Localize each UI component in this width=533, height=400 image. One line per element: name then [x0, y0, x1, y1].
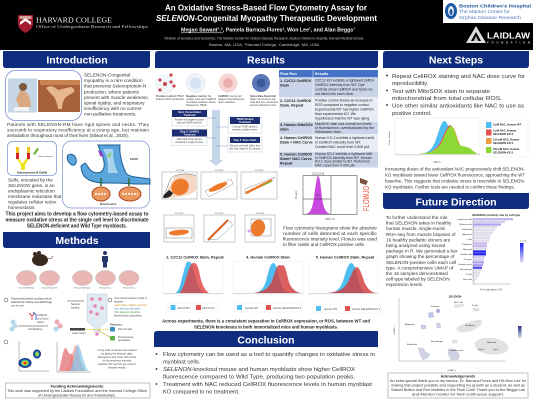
acknowledgements: Acknowledgements [441, 374, 475, 378]
intro text: spinal rigidity, and respiratory [84, 100, 145, 106]
patient description text: succumb to respiratory insufficiency at a young age, but maintain [7, 128, 149, 132]
legends: histograms: Human WT [324, 307, 338, 311]
panel: Results [155, 51, 381, 330]
chart: SELENON positivity by cell type: Pericytes [464, 258, 472, 261]
flow cytometry gating plots: C2C12-B [215, 170, 224, 172]
future direction text: 16 healthy pediatric donors are [386, 237, 451, 242]
legend: NAC dose curve [483, 120, 528, 157]
chart: C2C12-B CellROX histogram [294, 172, 357, 221]
control cell icons: CellROX: Living cell [218, 94, 242, 98]
step 1: cell loading: and Sytox [37, 316, 49, 320]
chart: SELENON positivity by cell type: Satellite cells [460, 253, 472, 256]
culture dishes: C2C12 Sepn1 KO [41, 288, 58, 290]
chart: SELENON positivity by cell type: Adipocytes [462, 233, 472, 236]
legend: NAC dose curve: 0 μM NAC, Human WT [493, 122, 522, 126]
chart: human CellROX stain repeat [309, 256, 378, 294]
chart: C2C12 CellROX stain repeat: 2. C2C12 CellROX Stain, Repeat [166, 256, 224, 260]
staining protocol timeline: Next, Uncontrolled [178, 111, 201, 114]
table: flow runs and results: Human KO-2 exhibits a rightward shift [315, 136, 374, 140]
chart: C2C12-B CellROX histogram: APC-A [325, 217, 335, 221]
results summary: Across experiments, there is a consistent separation in CellROX expression, or ROS, between WT and [162, 318, 370, 324]
conclusion bullets: Flow cytometry can be used as a tool to quantify changes in oxidative stress in [163, 352, 375, 358]
table: flow runs and results: Stain [280, 84, 290, 88]
NAC findings text: Increasing doses of the antioxidant NAC progressively shift SELENON- [385, 166, 525, 172]
next steps bullets: Use other similar antioxidants like NAC to use as [392, 104, 524, 110]
legend: NAC dose curve: SELENON-KO 2 [493, 141, 514, 145]
intro text [84, 72, 149, 117]
chart: C2C12-B CellROX histogram: Count [294, 191, 298, 199]
legend: NAC dose curve: 100 μM NAC, Human [493, 138, 520, 142]
flow cytometry explanation: fluorescence intensity level. FlowJo was used [283, 236, 377, 242]
intro text: myopathy is a rare condition [84, 78, 143, 83]
table: flow runs and results: Flow Run [280, 72, 297, 76]
future direction text: package in R. We generated a bar [386, 249, 458, 254]
chart: SELENON UMAP: Endothelial [407, 343, 417, 346]
culture dishes: Human Wild Type [75, 288, 91, 290]
panel: Future Direction [383, 193, 529, 398]
step 2 text: FSC detector identifies [114, 310, 141, 314]
poster title [156, 4, 377, 23]
table: flow runs and results: stain [280, 128, 289, 132]
chart: SELENON UMAP: UMAP_1 [448, 369, 457, 372]
table: flow runs and results: in CellROX intensity from WT. [315, 140, 361, 144]
staining protocol timeline: incubated in reagent before. [175, 141, 204, 144]
staining protocol timeline: Remove cells with buffer, then [230, 144, 261, 148]
flow cytometer: granularity [118, 338, 131, 342]
next steps bullets: mitochondrial from total cellular ROS. [392, 96, 502, 102]
legends: histograms: Human SELENON-KO 2 [273, 306, 302, 310]
next steps bullets [386, 74, 525, 117]
diagram: selenoprotein N structure: Selenoprotein N (SelN) [17, 170, 47, 174]
chart: SELENON positivity by cell type: Smooth muscle [458, 263, 473, 266]
heading: Results: Results [247, 54, 285, 66]
heading: Methods: Methods [55, 235, 99, 247]
control cell icons: upon oxidation. [218, 100, 236, 104]
diagram: selenoprotein N structure: Selenocysteine [38, 155, 54, 158]
panel: Methods [3, 232, 150, 398]
chart: SELENON positivity by cell type: Langerhans cells [457, 219, 472, 221]
legend: NAC dose curve: 0 μM NAC, Human [493, 128, 517, 132]
intro text: insufficiency with no current [84, 106, 142, 111]
conclusion bullets: SELENON-knockout mouse and human myoblasts show higher CellROX [163, 367, 355, 373]
flow cytometry explanation: to filter viable and CellROX positive cells. [283, 242, 365, 248]
chart: SELENON UMAP: Mast cells [454, 301, 463, 304]
flow cytometer: Fluorescence [118, 335, 134, 339]
heading: Results [155, 51, 378, 68]
chart: SELENON positivity by cell type: % cells [520, 240, 526, 242]
step 1: cell loading: CellROX [37, 313, 47, 317]
results summary [162, 318, 370, 330]
table: flow runs and results: Stain, Repeat [280, 104, 304, 108]
legends: histograms: Human SELENON-KO 2 [352, 307, 381, 311]
step 1: cell loading: one by one. [11, 304, 25, 308]
diagram: selenoprotein N structure [8, 142, 56, 176]
next steps bullets: Test with MitoSOX stain to separate [392, 89, 490, 95]
heading: Conclusion: Conclusion [237, 334, 295, 346]
table: flow runs and results: controls show CellROX and Sytox do [315, 88, 372, 92]
staining protocol timeline [172, 110, 262, 166]
flow cytometry explanation: Flow cytometry histograms show the absolute [283, 226, 377, 232]
flow cytometry gating plots [162, 170, 277, 242]
Laidlaw Foundation logo: FOUNDATION [487, 40, 530, 44]
flow cytometry explanation: number of cells detected at each specific [283, 231, 378, 237]
table: flow runs and results: Results [315, 72, 328, 76]
SelN description: regulates cellular redox [8, 200, 57, 204]
SelN description: SELENON gene, is an [8, 183, 55, 188]
table: flow runs and results: in CellROX intensity from WT. Human [315, 156, 372, 160]
flow cytometry gating plots: C2C12-B [256, 213, 265, 215]
panel: Conclusion [154, 331, 378, 396]
control cell icons: Stain: Fluorescent dye [250, 97, 276, 101]
chart: C2C12-B CellROX histogram: Bin [316, 193, 320, 197]
table: flow runs and results: of fluorescence, overshadowed by the [315, 126, 374, 130]
poster title: An Oxidative Stress-Based Flow Cytometry Assay for [165, 4, 367, 12]
future direction text: SELENON-positive cells each cell [386, 260, 456, 265]
staining protocol timeline: Treatment [184, 134, 196, 136]
chart: SELENON positivity by cell type: Schwann cells [459, 224, 472, 226]
header band [0, 0, 533, 50]
control cell icons: and are labeled in flow. [250, 103, 277, 107]
step 2 text: droplets. [114, 300, 124, 304]
future direction text: To further understand the role [386, 215, 448, 220]
patient description text [7, 122, 150, 138]
next steps bullets: reproducibility. [392, 81, 429, 87]
future direction text: the 16 samples demonstrated [386, 271, 448, 276]
chart: SELENON positivity by cell type: B cells [466, 274, 472, 276]
intro text: SELENON-Congenital [84, 72, 130, 78]
step 3: scatter and histogram results: between WT and KO are used to [98, 362, 136, 366]
step 2 text: fluorescence granularity [114, 314, 142, 318]
Harvard College logo [18, 15, 149, 33]
flow cytometer: Size of cells [118, 327, 133, 331]
future direction text: that SELENON takes in healthy [386, 221, 452, 226]
conclusion bullets [156, 352, 375, 396]
conclusion bullets: KO compared to no treatment. [163, 390, 240, 396]
affiliations: ¹Division of Genetics and Genomics, The Manton Center for Orphan Disease Research, Boston Children's Hospital, Harvard Medical School, [164, 36, 364, 40]
diagram: endoplasmic reticulum and mitochondria: ER/SR [130, 157, 138, 161]
future direction text: cell type labeled by SELENON [386, 277, 450, 282]
conclusion bullets: fluorescence compared to Wild Type, producing two population peaks. [163, 374, 355, 380]
chart: SELENON UMAP: Myonuclei [487, 342, 497, 344]
SelN description: homeostasis. [8, 205, 36, 210]
culture dishes [16, 270, 139, 290]
chart: SELENON positivity by cell type: SELENON positivity rate by cell type [472, 213, 521, 217]
chart: SELENON positivity by cell type: Myonuclei [463, 249, 473, 251]
step 2 text: Laser beam strikes each cell [114, 303, 147, 307]
flow cytometry gating plots: C2C12-B [175, 213, 184, 215]
SelN description [8, 178, 62, 210]
patient description text: Patients with SELENON-RM have rigid spines and necks. They [7, 122, 150, 127]
intro text: that prevents Selenoprotein-N [84, 84, 146, 89]
future direction text: RNA-seq from muscle biopsies of [386, 232, 456, 237]
staining protocol timeline: Treatment [239, 121, 251, 124]
heading: Introduction [3, 51, 150, 68]
flow cytometer: Sample [71, 302, 80, 306]
step 1: cell loading: loaded into the machine, and pulled through [11, 300, 53, 304]
step 3: scatter and histogram results: interpret results. [108, 366, 127, 370]
chart: SELENON positivity by cell type [457, 213, 526, 292]
table: flow runs and results: Positive control shows an increase in [315, 98, 372, 102]
project aim [6, 212, 149, 230]
step 1: cell loading: Cell labeling [28, 327, 43, 331]
conclusion bullets: myoblast cells. [163, 360, 201, 366]
legends: histograms [168, 303, 381, 313]
Harvard College logo: Office of Undergraduate Research and Fellowships [36, 25, 149, 29]
panel: Introduction [3, 51, 150, 230]
chart: SELENON positivity by cell type: Endothelial [462, 228, 473, 231]
funding acknowledgements: This work was supported by the Laidlaw Foundation and the Harvard College Office [7, 388, 147, 393]
Boston Children's Hospital logo [443, 0, 533, 23]
affiliations: Boston, MA, USA, ²Harvard College, Cambridge, MA, USA [209, 43, 320, 47]
staining protocol timeline: wells get TBHP and NAC [177, 122, 203, 124]
chart: SELENON UMAP: UMAP_2 [393, 325, 396, 334]
project aim: measure oxidative stress at the single cell level to discriminate [6, 218, 149, 224]
culture dishes: Human KO-2 [123, 288, 136, 290]
intro text: present with muscle weakness, [84, 95, 149, 100]
flow cytometer: Laser beam [72, 331, 86, 335]
acknowledgements: making this project possible and supporting my growth as a student, as well as [391, 384, 525, 388]
flow cytometry gating plots: C2C12-B [176, 170, 185, 172]
chart: human CellROX stain [233, 256, 303, 294]
table: flow runs and results: 3. Human MitoSOX [280, 123, 314, 127]
control cell icons: Sytox Blue Dead Cell [250, 94, 276, 98]
table: flow runs and results: KO-1 more similar to WT. Performed [315, 160, 370, 164]
legend: NAC dose curve: 200 μM NAC, Human [493, 147, 520, 151]
control cell icons: induces ROS production. [156, 97, 185, 101]
staining protocol timeline: increase oxidative stress. [232, 128, 258, 132]
chart: C2C12-B CellROX histogram: C2C12-B [312, 172, 324, 176]
table: flow runs and results: 2. C2C12 CellROX [280, 99, 312, 103]
acknowledgements: An extra special thank you to my mentor, Dr. Barraza-Flores and RA Won Lee for [390, 379, 527, 383]
future direction text: type. A comprehensive UMAP of [386, 265, 454, 270]
acknowledgements: and Manton Center for their continuous support. [412, 392, 504, 396]
results summary: SELENON knockouts in both immortalized mice and human myoblasts. [194, 324, 338, 330]
diagram: endoplasmic reticulum and mitochondria: Mitochondria [100, 202, 117, 206]
staining protocol timeline: Step 3: CellROX [180, 130, 199, 134]
step 2 text: Size detector identifies [114, 306, 141, 310]
funding acknowledgements: of Undergraduate Research and Fellowships. [38, 392, 116, 398]
NAC findings text: KO myoblasts toward lower CellROX fluorescence, approaching the WT [385, 172, 525, 178]
staining protocol timeline: Positive and negative control [175, 118, 205, 122]
table: flow runs and results: than experimental KO. We [315, 112, 356, 116]
step 1: cell loading [4, 296, 62, 332]
flow cytometry gating plots: C2C12-B [255, 170, 264, 172]
chart: SELENON UMAP [393, 294, 522, 372]
acknowledgements: Sakshi Bulina and Ron Mathieu in the Flow Core! Thank you to the Beggs Lab [391, 388, 525, 392]
patient description text: ambulation throughout most of their lives (Silwal et al., 2020). [7, 133, 129, 138]
future direction text: graph showing the percentage of [386, 254, 455, 259]
chart: SELENON positivity by cell type: Macrophages [460, 269, 472, 271]
chart: SELENON UMAP: SELENON [449, 294, 461, 298]
table: flow runs and results: Experimental WT has higher CellROX [315, 108, 374, 112]
Boston Children's Hospital logo: The Manton Center for [459, 9, 511, 14]
future direction text: expression levels. [386, 282, 423, 287]
intro text: non-palliative treatments. [84, 112, 136, 117]
affiliations [164, 36, 364, 47]
step 2 text [108, 296, 147, 318]
chart: NAC dose curve [388, 118, 480, 164]
table: flow runs and results: CellROX intensity from WT. Dye [315, 83, 365, 87]
SelN description: endoplasmic reticulum [8, 188, 55, 194]
table: flow runs and results: Repeat [280, 162, 293, 166]
flow cytometry explanation [283, 226, 378, 248]
heading: Future Direction: Future Direction [415, 196, 497, 208]
step 3: scatter and histogram results [4, 340, 137, 372]
heading: Next Steps: Next Steps [429, 54, 483, 66]
culture dishes: C2C12 Wild Type [19, 288, 35, 290]
SelN description: SelN, encoded by the [8, 178, 53, 182]
poster title: SELENON-Congenital Myopathy Therapeutic Development [156, 14, 377, 23]
NAC findings text: KO myoblasts. Further tests are needed to confirm these findings. [385, 184, 515, 190]
heading: Methods [3, 232, 150, 248]
icon: mouse [32, 251, 53, 266]
table: flow runs and results: Created NAC curve from 0-800 μM. [315, 145, 370, 149]
NAC findings text: baseline. This suggests that oxidative stress is reversible in SELENON- [385, 178, 525, 184]
chart: human CellROX stain: 4. Human CellROX Stain [246, 256, 291, 260]
Boston Children's Hospital logo: Boston Children's Hospital [459, 4, 532, 10]
chart: SELENON UMAP: Schwann [431, 306, 439, 308]
control cell icons: cells that lost membrane [250, 100, 279, 104]
control cell icons: treated cells with CellROX [186, 97, 216, 101]
chart: SELENON positivity by cell type: % of cells above 0.25 [480, 290, 503, 292]
project aim: This project aims to develop a flow cytometry-based assay to [6, 212, 148, 218]
table: flow runs and results: Human KO-2 exhibits a rightward shift [315, 152, 372, 156]
control cell icons: Positive control: TBHP [156, 94, 184, 98]
staining protocol timeline: Cells get TBHP added to [232, 126, 258, 128]
diagram: endoplasmic reticulum and mitochondria [62, 141, 150, 208]
chart: SELENON positivity by cell type: Fibroblasts [462, 243, 472, 246]
Harvard College logo: HARVARD COLLEGE [36, 16, 112, 24]
heading: Future Direction [383, 193, 529, 209]
future direction text: human muscle, single-nuclei [386, 226, 445, 231]
table: flow runs and results: Stain+ NAC Curve, [280, 157, 313, 161]
Boston Children's Hospital logo: Orphan Disease Research [459, 15, 522, 20]
chart: SELENON UMAP: Type I [493, 349, 499, 351]
chart: C2C12 CellROX stain repeat [163, 256, 224, 294]
table: flow runs and results: C2C12 KO exhibits a rightward shift in [315, 78, 374, 82]
chart: NAC dose curve: APC-A [433, 161, 441, 164]
step 2 text: Cell mixture leaves nozzle in [114, 296, 147, 300]
table: flow runs and results: 5. Human CellROX [280, 152, 313, 156]
funding acknowledgements: Funding Acknowledgements [51, 384, 103, 388]
chart: SELENON UMAP: Smooth muscle [450, 349, 465, 352]
flow cytometer: loading [71, 306, 80, 310]
chart: SELENON UMAP: Macrophages [431, 341, 443, 343]
chart: human CellROX stain repeat: 5. Human CellROX Stain, Repeat [316, 256, 375, 260]
step 1: cell loading: Fluorescently labeled myoblast cells are [11, 296, 53, 300]
legend: NAC dose curve: SELENON-KO 2 [493, 132, 514, 136]
Laidlaw Foundation logo: LAIDLAW [487, 32, 531, 40]
Laidlaw Foundation logo [466, 26, 531, 44]
next steps bullets: Repeat CellROX staining and NAC dose curve for [392, 74, 525, 80]
table: flow runs and results: not bleed into each other. [315, 92, 354, 96]
table: flow runs and results: Mitotracker stain. [315, 130, 342, 134]
legend: NAC dose curve: SELENON-KO 2 [493, 150, 514, 154]
flow cytometer: Detectors [110, 322, 123, 326]
chart: SELENON UMAP: Fibroblasts [465, 324, 475, 327]
next steps bullets: positive control. [392, 111, 432, 117]
intro text: production, where patients [84, 89, 140, 94]
step 1: cell loading: stains [37, 320, 44, 324]
project aim: SELENON-deficient and Wild Type myoblasts. [27, 224, 128, 230]
icon: FlowJo logo: FLOWJO [361, 186, 371, 211]
SelN description: membrane reductase that [8, 194, 62, 199]
table: flow runs and results [279, 70, 378, 168]
step 3: scatter and histogram results: Living cells of interest are isolated [98, 348, 137, 352]
heading: Conclusion [154, 331, 378, 347]
control cell icons: Negative control: No [186, 94, 212, 98]
table: flow runs and results: 4. Human CellROX [280, 136, 313, 140]
staining protocol timeline: Wells with living cells are [177, 138, 203, 141]
step 3: scatter and histogram results: Histograms and mean cell counts [98, 355, 137, 359]
chart: NAC dose curve: Norm. Events [388, 130, 391, 145]
step 3: scatter and histogram results: for fluorescence intensity [103, 358, 132, 362]
authors: Megan Sawant¹˒², Pamela Barraza-Flores², Won Lee¹, and Alan Beggs¹ [181, 26, 355, 34]
patient photographs [6, 70, 82, 120]
future direction text: being analyzed using Seurat [386, 243, 446, 248]
panel: Next Steps [383, 51, 529, 190]
acknowledgements [388, 373, 528, 398]
chart: SELENON UMAP: B cells [472, 305, 478, 307]
chart: SELENON UMAP: Type II [478, 349, 484, 351]
staining protocol timeline: add Sytox stain for 10 minutes. [229, 148, 261, 150]
chart: SELENON UMAP: Adipocytes [405, 323, 415, 326]
culture dishes: Human KO-1 [100, 288, 112, 290]
control cell icons: followed by TBHP. [186, 103, 207, 107]
table: flow runs and results: hypothesize that the WT was dying. [315, 116, 370, 120]
staining protocol timeline: Step 4: Sytox Stain [234, 139, 257, 142]
chart: SELENON positivity by cell type: Mast cells [463, 278, 472, 281]
legends: histograms: Human WT [245, 306, 259, 310]
chart: SELENON positivity by cell type: T cells [466, 239, 472, 241]
table: flow runs and results: Stain + NAC Curve [280, 140, 313, 144]
legends: histograms: C2C12 WT [177, 306, 190, 310]
table: flow runs and results: 1. C2C12 CellROX [280, 79, 312, 83]
table: flow runs and results: ROS compared to negative control. [315, 103, 370, 107]
conclusion bullets: Treatment with NAC reduced CellROX fluorescence levels in human myoblast [163, 382, 372, 388]
NAC findings text [385, 166, 525, 190]
flow cytometer [67, 294, 134, 342]
step 3: scatter and histogram results: by gating the detector data. [101, 352, 133, 356]
heading: Next Steps [383, 51, 529, 68]
staining protocol timeline: Treatment [184, 114, 196, 117]
flow cytometry gating plots: C2C12-B [215, 213, 224, 215]
control cell icons: no added oxidative stress, [186, 100, 216, 104]
staining protocol timeline: TBHP Oxidant [237, 118, 254, 121]
funding acknowledgements [6, 383, 150, 398]
legends: histograms: C2C12 KO [202, 306, 215, 310]
control cell icons [155, 73, 279, 107]
heading: Introduction: Introduction [46, 54, 108, 66]
table: flow runs and results: NAC curve from 0-200 μM. [315, 163, 355, 167]
table: flow runs and results: MitoSOX stain had overall low levels [315, 122, 372, 126]
future direction text [386, 215, 458, 287]
icon: human [102, 251, 108, 268]
control cell icons: reagent that fluoresces [218, 97, 245, 101]
